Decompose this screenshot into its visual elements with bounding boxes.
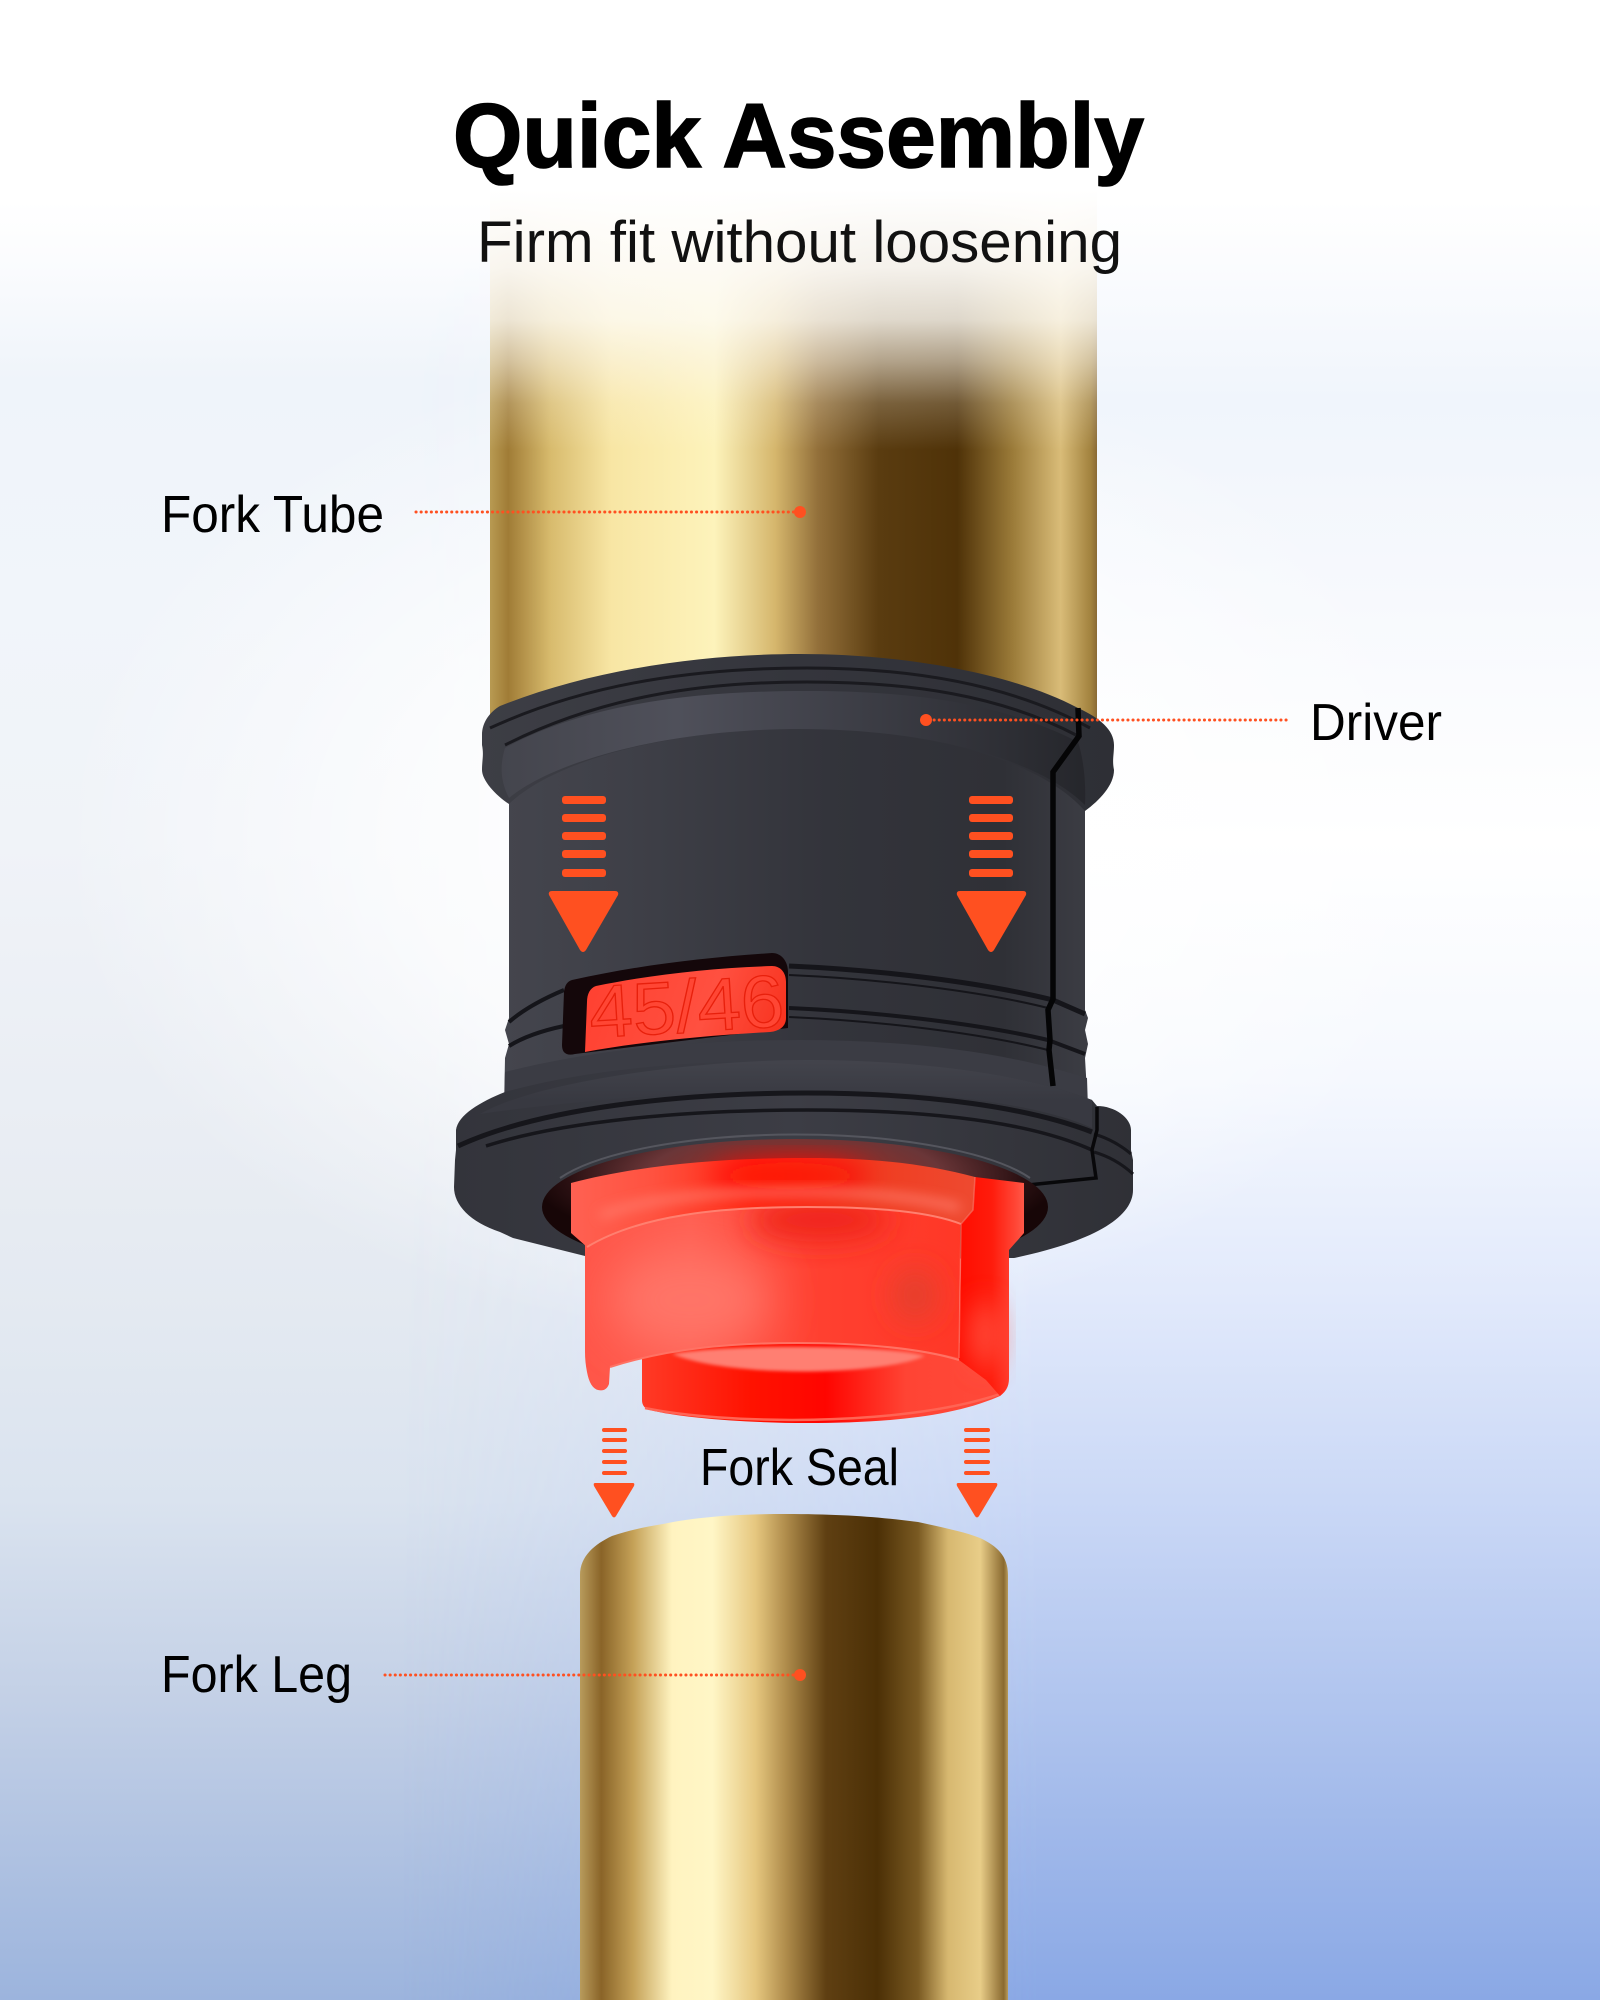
leader: driver [920, 714, 1291, 726]
seal right wall glow [971, 1301, 999, 1369]
seal step highlight [587, 1207, 961, 1247]
flange hole [542, 1135, 1048, 1275]
leader: fork leg [385, 1669, 806, 1681]
driver collar grooves [490, 668, 1090, 745]
fork tube [490, 190, 1097, 720]
driver body grooves [509, 966, 1085, 1054]
driver flange [454, 1060, 1133, 1258]
seal upper highlight [600, 1192, 960, 1216]
driver collar [482, 654, 1114, 811]
seal right wall [959, 1177, 1024, 1396]
driver [454, 654, 1133, 1275]
leader: fork tube [416, 506, 806, 518]
driver body [504, 700, 1088, 1110]
seal bottom rim [645, 1394, 1000, 1420]
seal wall rim [610, 1343, 959, 1367]
seal inner glow [672, 1347, 925, 1372]
driver collar band [502, 691, 1085, 805]
driver lower shoulder [504, 1040, 1088, 1110]
label: fork leg: Fork Leg [161, 1646, 352, 1704]
label: fork seal: Fork Seal [700, 1439, 899, 1497]
seal notch [959, 1177, 975, 1358]
seal outer wall [585, 1208, 961, 1390]
fork seal [571, 1158, 1024, 1423]
driver arrows [549, 796, 1026, 952]
fork leg [580, 1514, 1008, 2000]
label: fork tube: Fork Tube [161, 486, 384, 544]
window: size label: 45/46 [587, 959, 786, 1054]
flange grooves [458, 1093, 1133, 1185]
label: driver: Driver [1310, 694, 1442, 752]
seal arrows [594, 1428, 997, 1518]
seal upper ring [571, 1158, 975, 1247]
title: Quick Assembly [453, 86, 1144, 187]
subtitle: Firm fit without loosening [477, 210, 1122, 275]
seal inner wall [642, 1343, 1009, 1423]
flange top face [480, 1060, 1092, 1128]
driver slit [1048, 708, 1079, 1086]
seal hot spot [710, 1162, 870, 1190]
